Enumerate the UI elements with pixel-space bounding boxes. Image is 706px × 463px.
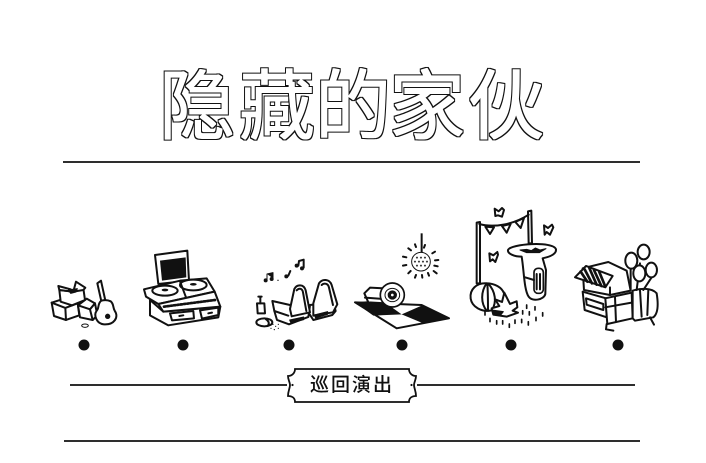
- title: [159, 65, 544, 150]
- title: 伙: [468, 65, 544, 150]
- icon: turntable console: [144, 251, 220, 325]
- icon: boxes and guitar: [52, 281, 116, 327]
- icon: seats and music notes: [256, 260, 337, 330]
- icon: disco ball and records on checkered mat: [355, 233, 449, 328]
- icon: tuba, bunting, pumpkin and plant: [471, 208, 556, 331]
- icon: market stall with balloons: [575, 245, 658, 331]
- title: 隐: [159, 65, 235, 150]
- timeline dots: [78, 340, 624, 350]
- title: 家: [389, 65, 465, 150]
- title: 藏: [239, 65, 315, 150]
- label: tour: [288, 369, 416, 402]
- label: tour: 巡回演出: [310, 374, 394, 396]
- title: 的: [315, 65, 391, 150]
